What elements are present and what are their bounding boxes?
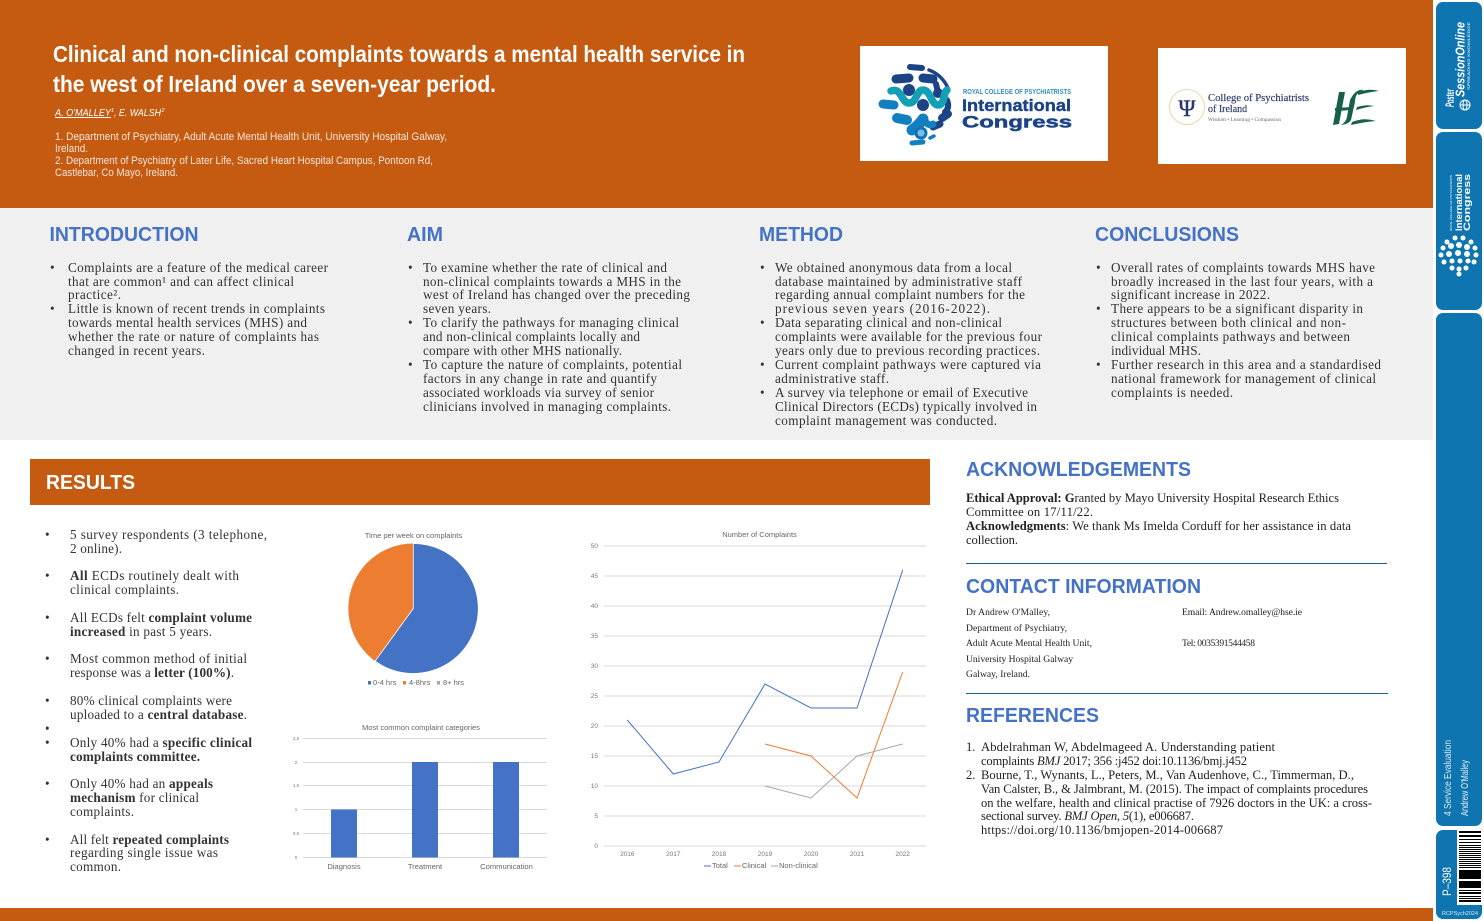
bar chart: most common complaint categories: 1,5 <box>293 783 300 788</box>
line chart: number of complaints: 2022 <box>895 851 910 858</box>
results bullet list: • <box>45 651 50 666</box>
panel: international congress: Congress <box>1462 174 1472 231</box>
panel: contact information <box>966 575 1302 680</box>
pie legend: 0-4 hrs <box>373 678 397 687</box>
panel: contact information: University Hospital Galway <box>966 654 1073 665</box>
panel: conclusions: Further research in this area and a standardised <box>1111 357 1381 372</box>
logo: Royal College of Psychiatrists International Congress: ROYAL COLLEGE OF PSYCHIATRISTS <box>963 89 1071 96</box>
authors: A. O'MALLEY <box>54 108 112 119</box>
panel: conclusions: There appears to be a significant disparity in <box>1111 301 1363 316</box>
bar chart: most common complaint categories: 2,5 <box>293 736 300 741</box>
panel: introduction: towards mental health services (MHS) and <box>68 315 307 330</box>
results bullet list: common. <box>70 859 121 874</box>
panel: acknowledgements: Acknowledgments: We thank Ms Imelda Corduff for her assistance in data <box>966 519 1351 533</box>
panel: aim: To examine whether the rate of clinical and <box>423 260 667 275</box>
panel: method: complaints were available for the previous four <box>775 329 1043 344</box>
pie legend: 8+ hrs <box>443 678 464 687</box>
panel: aim: factors in any change in rate and quantify <box>423 371 657 386</box>
heading: aim: AIM <box>407 223 443 246</box>
panel: contact information: Adult Acute Mental Health Unit, <box>966 638 1092 649</box>
results bullet list: increased in past 5 years. <box>70 624 212 639</box>
logo: Royal College of Psychiatrists International Congress: International <box>962 97 1071 115</box>
panel: international congress <box>1436 132 1482 310</box>
panel: conclusions: • <box>1096 260 1101 275</box>
logo: College of Psychiatrists of Ireland and HSE: Ψ <box>1179 96 1196 121</box>
line chart: number of complaints: 40 <box>591 603 598 610</box>
results bullet list: All ECDs felt complaint volume <box>70 610 252 625</box>
panel: method: Clinical Directors (ECDs) typically involved in <box>775 399 1037 414</box>
panel: references <box>966 704 1372 837</box>
line chart: number of complaints: 2017 <box>666 851 681 858</box>
heading: introduction: INTRODUCTION <box>50 223 198 246</box>
line chart: number of complaints: 25 <box>591 693 598 700</box>
results bullet list: response was a letter (100%). <box>70 665 234 680</box>
panel: contact information: Email: Andrew.omalley@hse.ie <box>1182 607 1302 618</box>
title: Clinical and non-clinical complaints towards a mental health service in <box>53 41 745 67</box>
affiliations: 1. Department of Psychiatry, Adult Acute Mental Health Unit, University Hospital Galway, <box>55 131 447 143</box>
authors: , E. WALSH <box>114 108 162 119</box>
panel: introduction: that are common¹ and can affect clinical <box>68 274 294 289</box>
panel: poster number and barcode: P–398 <box>1440 867 1454 896</box>
bar chart: most common complaint categories: 0 <box>295 855 298 860</box>
panel: method: years only due to previous recording practices. <box>775 343 1040 358</box>
panel: method: Current complaint pathways were captured via <box>775 357 1041 372</box>
logo: College of Psychiatrists of Ireland and HSE <box>1158 48 1406 164</box>
results bullet list: • <box>45 735 50 750</box>
results heading bar: RESULTS <box>46 471 135 494</box>
line chart: number of complaints: Number of Complaints <box>722 530 797 539</box>
title <box>53 41 745 97</box>
panel: method: A survey via telephone or email of Executive <box>775 385 1028 400</box>
panel: contact information: Dr Andrew O'Malley, <box>966 607 1050 618</box>
panel: contact information: Department of Psychiatry, <box>966 623 1067 634</box>
results bullet list: • <box>45 721 50 736</box>
panel: conclusions: Overall rates of complaints towards MHS have <box>1111 260 1375 275</box>
panel: aim: • <box>408 315 413 330</box>
panel: introduction <box>50 223 329 358</box>
panel: poster title and author: 4 Service Evaluation <box>1442 740 1454 816</box>
panel: poster number and barcode: RCPSych2024 <box>1442 911 1478 917</box>
results bullet list: Most common method of initial <box>70 651 247 666</box>
panel: method: Data separating clinical and non-clinical <box>775 315 1002 330</box>
results bullet list: uploaded to a central database. <box>70 707 247 722</box>
panel: aim: compare with other MHS nationally. <box>423 343 622 358</box>
results bullet list: • <box>45 610 50 625</box>
line chart: number of complaints: 20 <box>591 723 598 730</box>
heading: conclusions: CONCLUSIONS <box>1095 223 1239 246</box>
results bullet list: • <box>45 568 50 583</box>
panel: conclusions: significant increase in 2022. <box>1111 287 1270 302</box>
panel: aim <box>407 223 690 414</box>
affiliations: 2. Department of Psychiatry of Later Life, Sacred Heart Hospital Campus, Pontoon Rd, <box>55 155 433 167</box>
icon: dotted globe <box>1438 236 1478 276</box>
panel: top grey section <box>0 208 1433 440</box>
panel: conclusions <box>1095 223 1381 400</box>
panel: conclusions: complaints is needed. <box>1111 385 1233 400</box>
icon: barcode <box>1459 831 1481 902</box>
logo: Royal College of Psychiatrists International Congress <box>860 46 1108 161</box>
affiliations: Castlebar, Co Mayo, Ireland. <box>55 167 178 179</box>
panel: method: • <box>760 357 765 372</box>
panel: introduction: practice². <box>68 287 121 302</box>
panel: acknowledgements <box>966 458 1351 547</box>
line chart: number of complaints: 2018 <box>712 851 727 858</box>
panel: aim: seven years. <box>423 301 491 316</box>
panel: references: Bourne, T., Wynants, L., Peters, M., Van Audenhove, C., Timmerman, D., <box>981 768 1354 782</box>
pie chart: time per week on complaints: Time per week on complaints <box>365 531 462 540</box>
results bullet list: • <box>45 527 50 542</box>
results bullet list: 2 online). <box>70 541 122 556</box>
results bullet list: complaints committee. <box>70 749 200 764</box>
panel: aim: non-clinical complaints towards a MHS in the <box>423 274 681 289</box>
affiliations <box>55 131 447 179</box>
heading: contact information: CONTACT INFORMATION <box>966 575 1201 598</box>
panel: poster session online: SessionOnline <box>1452 22 1468 97</box>
results heading bar <box>30 459 930 505</box>
panel: method: complaint management was conducted. <box>775 413 997 428</box>
panel: references: 1. <box>966 740 975 754</box>
line chart: number of complaints: 2020 <box>804 851 819 858</box>
panel: introduction: whether the rate or nature of complaints has <box>68 329 319 344</box>
panel: conclusions: clinical complaints pathways and between <box>1111 329 1350 344</box>
panel: poster session online: Poster <box>1443 88 1457 107</box>
panel: references: on the welfare, health and clinical practise of 7926 doctors in the UK: a cross- <box>981 796 1372 810</box>
icon: globe <box>1460 100 1470 110</box>
results bullet list: 5 survey respondents (3 telephone, <box>70 527 267 542</box>
line chart legend <box>704 861 818 870</box>
header banner <box>0 0 1433 208</box>
line chart legend: Total <box>712 861 728 870</box>
panel: introduction: Complaints are a feature of the medical career <box>68 260 329 275</box>
heading: acknowledgements: ACKNOWLEDGEMENTS <box>966 458 1191 481</box>
panel: method: • <box>760 385 765 400</box>
bar chart: most common complaint categories: 0,5 <box>293 831 300 836</box>
line chart: number of complaints: 2021 <box>850 851 865 858</box>
bar chart: most common complaint categories: Communication <box>480 862 533 871</box>
results bullet list: • <box>45 832 50 847</box>
bar chart: most common complaint categories: 1 <box>295 807 298 812</box>
panel: method: database maintained by administrative staff <box>775 274 1023 289</box>
panel: references: 2. <box>966 768 975 782</box>
line chart: number of complaints: 30 <box>591 663 598 670</box>
panel: conclusions: broadly increased in the last four years, with a <box>1111 274 1373 289</box>
panel: poster number and barcode <box>1436 830 1482 919</box>
results bullet list: • <box>45 776 50 791</box>
logo: Royal College of Psychiatrists International Congress: Congress <box>962 114 1072 132</box>
line chart: number of complaints: 50 <box>591 543 598 550</box>
panel: aim: To capture the nature of complaints, potential <box>423 357 682 372</box>
line chart: number of complaints: 35 <box>591 633 598 640</box>
results bullet list: clinical complaints. <box>70 582 179 597</box>
pie chart: time per week on complaints <box>348 531 478 687</box>
bar chart: most common complaint categories <box>293 723 547 871</box>
results bullet list: complaints. <box>70 804 134 819</box>
line chart legend: Clinical <box>742 861 767 870</box>
panel: aim: and non-clinical complaints locally and <box>423 329 640 344</box>
bottom bar <box>0 908 1433 921</box>
panel: contact information: Tel: 0035391544458 <box>1182 638 1255 649</box>
bar chart: most common complaint categories: Most common complaint categories <box>362 723 480 732</box>
panel: acknowledgements: collection. <box>966 533 1018 547</box>
panel: poster title and author <box>1436 313 1482 826</box>
pie legend <box>368 678 464 687</box>
panel: method: previous seven years (2016-2022). <box>775 301 990 316</box>
line chart: number of complaints: 5 <box>594 813 598 820</box>
authors <box>54 108 165 119</box>
results bullet list <box>45 527 267 874</box>
panel: introduction: • <box>50 260 55 275</box>
panel: conclusions: • <box>1096 301 1101 316</box>
results bullet list: regarding single issue was <box>70 845 218 860</box>
panel: poster session online: SPREADING KNOWLEDGE <box>1466 22 1471 90</box>
authors: 2 <box>160 108 165 114</box>
results bullet list: Only 40% had a specific clinical <box>70 735 252 750</box>
sidebar <box>1436 2 1482 919</box>
results bullet list: mechanism for clinical <box>70 790 199 805</box>
line chart: number of complaints: 0 <box>594 843 598 850</box>
results bullet list: All ECDs routinely dealt with <box>70 568 239 583</box>
panel: conclusions: • <box>1096 357 1101 372</box>
line chart: number of complaints: 45 <box>591 573 598 580</box>
bar chart: most common complaint categories: Diagnosis <box>327 862 361 871</box>
panel: method <box>759 223 1043 428</box>
panel: poster session online <box>1436 2 1482 129</box>
panel: aim: clinicians involved in managing complaints. <box>423 399 671 414</box>
panel: method: • <box>760 260 765 275</box>
panel: references: complaints BMJ 2017; 356 :j452 doi:10.1136/bmj.j452 <box>981 754 1247 768</box>
panel: references: https://doi.org/10.1136/bmjopen-2014-006687 <box>981 823 1223 837</box>
panel: method: • <box>760 315 765 330</box>
panel: aim: To clarify the pathways for managing clinical <box>423 315 679 330</box>
results bullet list: All felt repeated complaints <box>70 832 229 847</box>
panel: conclusions: individual MHS. <box>1111 343 1201 358</box>
panel: poster title and author: Andrew O'Malley <box>1459 759 1471 816</box>
panel: method: We obtained anonymous data from a local <box>775 260 1012 275</box>
title: the west of Ireland over a seven-year period. <box>53 71 496 97</box>
panel: aim: associated workloads via survey of senior <box>423 385 655 400</box>
bar chart: most common complaint categories: 2 <box>295 760 298 765</box>
panel: aim: • <box>408 357 413 372</box>
heading: references: REFERENCES <box>966 704 1099 727</box>
logo: College of Psychiatrists of Ireland and HSE: Wisdom • Learning • Compassion <box>1208 118 1282 123</box>
results bullet list: • <box>45 693 50 708</box>
affiliations: Ireland. <box>55 143 88 155</box>
logo: College of Psychiatrists of Ireland and HSE: of Ireland <box>1208 104 1247 115</box>
panel: acknowledgements: Committee on 17/11/22. <box>966 505 1093 519</box>
results bullet list: 80% clinical complaints were <box>70 693 232 708</box>
panel: contact information: Galway, Ireland. <box>966 669 1030 680</box>
line chart: number of complaints: 15 <box>591 753 598 760</box>
panel: conclusions: structures between both clinical and non- <box>1111 315 1346 330</box>
line chart: number of complaints: 2016 <box>620 851 635 858</box>
line chart: number of complaints: 2019 <box>758 851 773 858</box>
line chart: number of complaints: 10 <box>591 783 598 790</box>
panel: introduction: Little is known of recent trends in complaints <box>68 301 325 316</box>
panel: references: sectional survey. BMJ Open, 5(1), e006687. <box>981 809 1194 823</box>
heading: method: METHOD <box>759 223 843 246</box>
pie legend: 4-8hrs <box>409 678 431 687</box>
panel: references: Abdelrahman W, Abdelmageed A. Understanding patient <box>981 740 1276 754</box>
panel: method: administrative staff. <box>775 371 889 386</box>
logo: College of Psychiatrists of Ireland and HSE: College of Psychiatrists <box>1208 93 1309 104</box>
line chart legend: Non-clinical <box>779 861 818 870</box>
authors: 1 <box>111 108 114 114</box>
panel: introduction: • <box>50 301 55 316</box>
panel: method: regarding annual complaint numbers for the <box>775 287 1025 302</box>
line chart: number of complaints <box>591 530 926 870</box>
panel: international congress: International <box>1454 174 1464 231</box>
results bullet list: Only 40% had an appeals <box>70 776 213 791</box>
panel: introduction: changed in recent years. <box>68 343 205 358</box>
panel: international congress: ROYAL COLLEGE OF PSYCHIATRISTS <box>1449 175 1453 231</box>
panel: acknowledgements: Ethical Approval: Granted by Mayo University Hospital Research Ethics <box>966 491 1339 505</box>
panel: conclusions: national framework for management of clinical <box>1111 371 1376 386</box>
panel: aim: • <box>408 260 413 275</box>
panel: references: Van Calster, B., & Jalmbrant, M. (2015). The impact of complaints procedures <box>981 782 1368 796</box>
panel: aim: west of Ireland has changed over the preceding <box>423 287 690 302</box>
bar chart: most common complaint categories: Treatment <box>408 862 443 871</box>
